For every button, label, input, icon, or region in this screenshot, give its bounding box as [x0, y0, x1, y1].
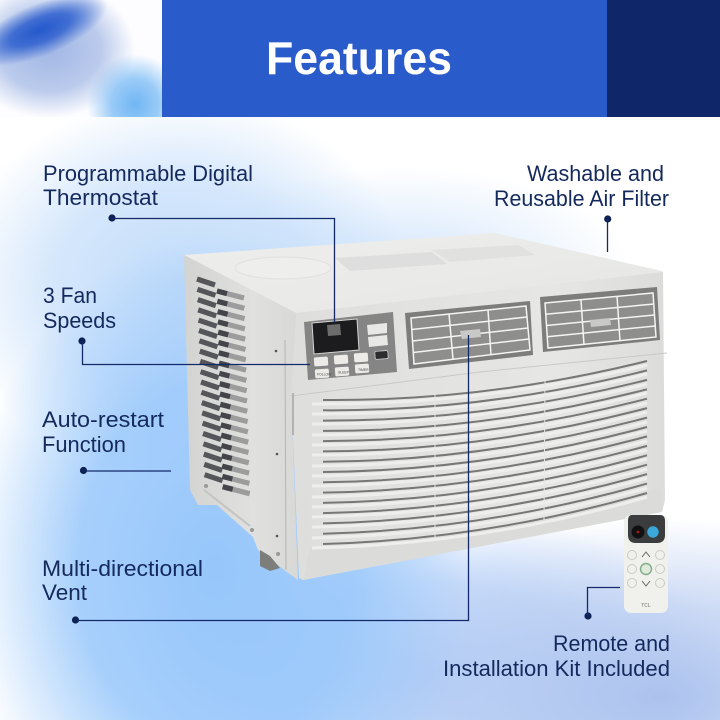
remote keypad — [628, 550, 664, 588]
header accent block — [607, 0, 720, 117]
title: Features — [266, 32, 452, 84]
function buttons: TIMER — [358, 368, 369, 372]
label: programmable digital thermostat: Thermostat — [43, 185, 158, 210]
label: washable air filter — [494, 161, 669, 211]
leader line: fan speeds — [78, 337, 310, 364]
remote brand: TCL — [641, 603, 651, 609]
label: programmable digital thermostat — [43, 161, 253, 210]
label: 3 fan speeds — [43, 283, 116, 333]
remote top panel — [628, 515, 665, 543]
function buttons: SLEEP — [338, 370, 350, 374]
label: multi-directional vent — [42, 556, 203, 605]
leader line: air filter — [604, 215, 611, 252]
leader line: auto-restart — [80, 467, 171, 474]
label: remote and kit: Remote and — [553, 631, 670, 656]
header band — [162, 0, 607, 117]
power button — [632, 526, 644, 538]
digital display — [312, 319, 359, 354]
label: washable air filter: Reusable Air Filter — [494, 186, 669, 211]
leader line: vent — [72, 335, 469, 624]
leader line: remote — [584, 588, 620, 620]
header corner gradient — [0, 0, 162, 117]
function buttons: FOLLOW — [317, 372, 332, 376]
mounting foot — [260, 550, 280, 571]
right air vent — [540, 287, 660, 352]
side grille — [197, 279, 250, 494]
unit top face — [184, 233, 663, 313]
label: remote and kit: Installation Kit Included — [443, 656, 670, 681]
label: 3 fan speeds: 3 Fan — [43, 283, 97, 308]
leader line: thermostat — [108, 214, 335, 323]
control panel — [304, 312, 397, 380]
label: auto-restart function — [42, 407, 164, 457]
label: auto-restart function: Function — [42, 432, 126, 457]
label: 3 fan speeds: Speeds — [43, 308, 116, 333]
air conditioner unit — [184, 233, 667, 580]
remote control — [624, 515, 668, 613]
left air vent — [405, 301, 533, 369]
cool button — [647, 526, 659, 538]
label: washable air filter: Washable and — [527, 161, 664, 186]
label: programmable digital thermostat: Programmable Digital — [43, 161, 253, 186]
label: multi-directional vent: Multi-directional — [42, 556, 203, 581]
unit left side — [184, 255, 298, 580]
up and down buttons — [367, 323, 388, 347]
front louvers — [312, 361, 647, 548]
function buttons — [314, 351, 388, 378]
label: multi-directional vent: Vent — [42, 580, 87, 605]
unit front face — [291, 272, 667, 580]
label: auto-restart function: Auto-restart — [42, 407, 164, 432]
label: remote and kit — [443, 631, 670, 681]
